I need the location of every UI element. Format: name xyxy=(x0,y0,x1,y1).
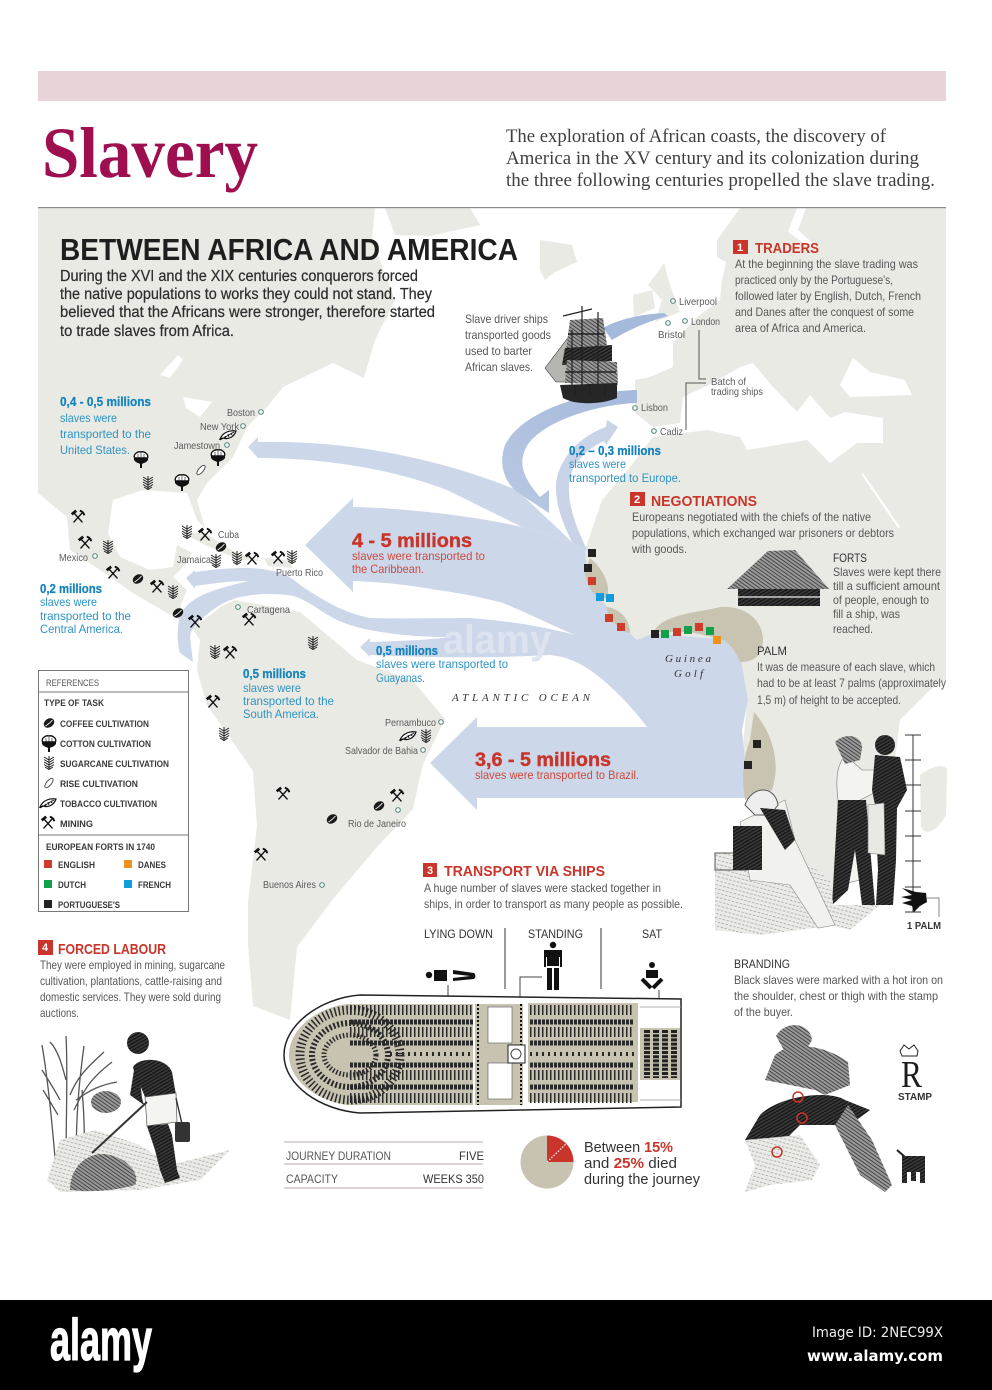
intro text xyxy=(506,127,935,191)
illustration: seated man on crate xyxy=(715,790,836,935)
America city labels: New York xyxy=(200,421,240,433)
batch of trading ships callout: Batch of xyxy=(711,376,746,388)
stat: to South America: 0,5 millions xyxy=(243,667,306,681)
table: journey facts: JOURNEY DURATION xyxy=(286,1149,391,1163)
position labels: SAT xyxy=(642,927,663,941)
stat: to Guayanas: slaves were transported to xyxy=(376,657,508,671)
panel: references legend: DUTCH xyxy=(58,880,86,891)
illustration: buyer inspecting slave xyxy=(830,735,907,930)
position labels xyxy=(424,927,663,989)
section 1: traders xyxy=(733,240,921,335)
stat: to Central America: Central America. xyxy=(40,622,123,636)
panel: references legend xyxy=(38,670,189,912)
text: branding: Black slaves were marked with a hot iron on xyxy=(734,973,943,987)
America city labels: Boston xyxy=(227,407,255,419)
caption: slave driver ships: used to barter xyxy=(465,344,532,358)
panel: references legend: RISE CULTIVATION xyxy=(60,779,138,790)
America city labels: Mexico xyxy=(59,552,88,564)
palm height scale: 1 PALM xyxy=(907,920,941,932)
arrow: Lisbon to Africa xyxy=(502,390,637,513)
Europe port labels: Cadiz xyxy=(660,426,683,438)
Europe port labels: Lisbon xyxy=(641,402,668,414)
stat: to Europe xyxy=(569,444,681,485)
section 3: transport via ships: A huge number of slaves were stacked together in xyxy=(424,881,661,895)
America city labels: Pernambuco xyxy=(385,717,436,729)
stat: to South America: transported to the xyxy=(243,694,334,708)
text: death toll: during the journey xyxy=(584,1171,700,1188)
text: forts: of people, enough to xyxy=(833,593,929,607)
panel: references legend: PORTUGUESE'S xyxy=(58,900,120,911)
label: Guinea Golf xyxy=(665,653,712,680)
text: death toll: and 25% died xyxy=(584,1155,677,1172)
panel: references legend: TOBACCO CULTIVATION xyxy=(60,799,157,810)
illustration: field worker xyxy=(42,1032,230,1192)
stat: to South America: slaves were xyxy=(243,681,301,695)
America city labels: Jamestown xyxy=(174,440,220,452)
section 1: traders: 1 xyxy=(737,242,743,254)
stat: to Europe: slaves were xyxy=(569,457,626,471)
icon: standing figure xyxy=(520,942,562,1003)
America city labels: Buenos Aires xyxy=(263,879,316,891)
stat: to Guayanas: 0,5 millions xyxy=(376,644,438,658)
palm height scale xyxy=(901,735,941,932)
pie chart: deaths during the journey xyxy=(520,1136,574,1188)
section 1: traders: area of Africa and America. xyxy=(735,321,866,335)
stat: to Europe: 0,2 – 0,3 millions xyxy=(569,444,661,458)
lead paragraph: believed that the Africans were stronger, therefore started xyxy=(60,304,435,321)
America city labels: Rio de Janeiro xyxy=(348,818,406,830)
stat: to Central America: 0,2 millions xyxy=(40,582,102,596)
panel: references legend: TYPE OF TASK xyxy=(44,698,104,709)
text: palm: had to be at least 7 palms (approximately xyxy=(757,676,946,690)
section 3: transport via ships: ships, in order to transport as many people as possible. xyxy=(424,897,683,911)
section 4: forced labour xyxy=(38,940,225,1020)
America city labels: Salvador de Bahia xyxy=(345,745,418,757)
stat: to South America: South America. xyxy=(243,707,319,721)
label: Atlantic Ocean: ATLANTIC OCEAN xyxy=(451,692,591,704)
section 1: traders: At the beginning the slave trading was xyxy=(735,257,918,271)
America city labels: Jamaica xyxy=(177,554,211,566)
stat: to South America xyxy=(243,667,334,721)
stat: to Brazil: slaves were transported to Brazil. xyxy=(475,768,639,782)
table: journey facts: FIVE xyxy=(459,1149,484,1163)
America city labels: Cartagena xyxy=(247,604,290,616)
text: forts: FORTS xyxy=(833,551,867,565)
icon: seated figure xyxy=(642,962,662,1028)
top banner band xyxy=(38,71,946,101)
panel: references legend: COTTON CULTIVATION xyxy=(60,739,151,750)
alamy watermark: alamy xyxy=(443,618,552,662)
stat: to the United States: transported to the xyxy=(60,427,151,441)
stat: to Central America: transported to the xyxy=(40,609,131,623)
text: death toll xyxy=(584,1139,700,1188)
icon: branding iron brazier xyxy=(897,1150,925,1183)
stat: to the United States: 0,4 - 0,5 millions xyxy=(60,395,151,409)
America city labels: Puerto Rico xyxy=(276,567,323,579)
arrows from Europe xyxy=(502,313,668,552)
stat: to the Caribbean: the Caribbean. xyxy=(352,562,424,576)
slave trade flow arrows xyxy=(178,437,748,810)
text: branding: BRANDING xyxy=(734,957,790,971)
panel: references legend: DANES xyxy=(138,860,166,871)
icon: stamp monogram xyxy=(898,1045,932,1103)
section 4: forced labour: They were employed in mining, sugarcane xyxy=(40,958,225,972)
America city labels: Cuba xyxy=(218,529,239,541)
footer bar: www.alamy.com xyxy=(807,1347,943,1365)
text: palm: 1,5 m) of height to be accepted. xyxy=(757,693,901,707)
batch of trading ships callout: trading ships xyxy=(711,386,763,398)
caption: slave driver ships: Slave driver ships xyxy=(465,312,548,326)
text: palm: It was de measure of each slave, which xyxy=(757,660,935,674)
table: journey facts xyxy=(284,1142,484,1188)
stat: to Guayanas xyxy=(376,644,508,685)
arrow: main stream to the Caribbean, Central and South America, Guayanas and Brazil xyxy=(178,498,748,810)
text: forts: reached. xyxy=(833,622,873,636)
text: palm xyxy=(757,644,946,707)
section 4: forced labour: 4 xyxy=(42,942,49,954)
stat: to Brazil: 3,6 - 5 millions xyxy=(475,750,611,771)
stat: to Central America xyxy=(40,582,131,636)
title: Slavery xyxy=(42,113,258,193)
text: branding: the shoulder, chest or thigh with the stamp xyxy=(734,989,938,1003)
stat: to the United States: slaves were xyxy=(60,411,117,425)
section 4: forced labour: domestic services. They were sold during xyxy=(40,990,221,1004)
panel: references legend: SUGARCANE CULTIVATION xyxy=(60,759,169,770)
stat: to the Caribbean: slaves were transported to xyxy=(352,549,485,563)
text: branding xyxy=(734,957,943,1019)
map top rule xyxy=(38,207,946,208)
caption: slave driver ships xyxy=(465,312,551,374)
icon: lying figure xyxy=(426,970,476,1003)
America city labels xyxy=(59,407,443,891)
map task icons xyxy=(72,431,431,860)
section 4: forced labour: cultivation, plantations, cattle-raising and xyxy=(40,974,222,988)
Europe port labels xyxy=(633,296,720,438)
text: death toll: Between 15% xyxy=(584,1139,673,1156)
section 2: negotiations: 2 xyxy=(634,494,640,506)
map seas and lakes xyxy=(160,208,912,528)
illustration: fort xyxy=(727,550,829,606)
European forts xyxy=(584,549,761,769)
stat: to Europe: transported to Europe. xyxy=(569,471,681,485)
intro text: the three following centuries propelled the slave trading. xyxy=(506,171,935,191)
stat: to Brazil xyxy=(475,750,639,782)
panel: references legend: MINING xyxy=(60,819,93,830)
panel: references legend: REFERENCES xyxy=(46,678,99,689)
intro text: The exploration of African coasts, the discovery of xyxy=(506,127,887,147)
section 2: negotiations: with goods. xyxy=(631,542,687,556)
lead paragraph: the native populations to works they could not stand. They xyxy=(60,286,432,303)
section 4: forced labour: auctions. xyxy=(40,1006,79,1020)
footer bar: Image ID: 2NEC99X xyxy=(812,1325,943,1341)
panel: references legend: EUROPEAN FORTS IN 1740 xyxy=(46,842,155,853)
batch of trading ships callout xyxy=(686,330,763,430)
text: forts xyxy=(833,551,941,636)
lead paragraph xyxy=(60,268,435,340)
text: branding: of the buyer. xyxy=(734,1005,793,1019)
stat: to the Caribbean: 4 - 5 millions xyxy=(352,531,472,552)
section 3: transport via ships xyxy=(423,863,683,911)
panel: references legend: COFFEE CULTIVATION xyxy=(60,719,149,730)
section 2: negotiations xyxy=(630,492,894,556)
section 1: traders: and Danes after the conquest of some xyxy=(735,305,914,319)
section 3: transport via ships: 3 xyxy=(427,865,433,877)
lead paragraph: During the XVI and the XIX centuries conquerors forced xyxy=(60,268,418,285)
table: journey facts: WEEKS 350 xyxy=(423,1172,484,1186)
label: Guinea Golf: Golf xyxy=(674,668,705,680)
section 1: traders: followed later by English, Dutch, French xyxy=(735,289,921,303)
position labels: LYING DOWN xyxy=(424,927,493,941)
table: journey facts: CAPACITY xyxy=(286,1172,338,1186)
illustration: branding scene xyxy=(745,1025,892,1192)
section 1: traders: TRADERS xyxy=(755,240,819,257)
Europe port labels: Bristol xyxy=(658,329,685,341)
stat: to the United States xyxy=(60,395,151,457)
caption: slave driver ships: African slaves. xyxy=(465,360,533,374)
footer bar: alamy xyxy=(50,1308,152,1373)
caption: slave driver ships: transported goods xyxy=(465,328,551,342)
icon: stamp monogram: STAMP xyxy=(898,1091,932,1103)
Europe port labels: London xyxy=(691,316,720,328)
intro text: America in the XV century and its colonization during xyxy=(506,149,919,169)
position labels: STANDING xyxy=(528,927,583,941)
world map land masses xyxy=(38,208,947,1020)
section 2: negotiations: Europeans negotiated with the chiefs of the native xyxy=(632,510,871,524)
diagram: slave ship deck plan xyxy=(284,995,681,1113)
text: palm: PALM xyxy=(757,644,787,658)
section 3: transport via ships: TRANSPORT VIA SHIPS xyxy=(444,863,605,880)
heading: between Africa and America: BETWEEN AFRICA AND AMERICA xyxy=(60,232,518,267)
text: forts: till a sufficient amount xyxy=(833,579,941,593)
stat: to the United States: United States. xyxy=(60,443,130,457)
section 2: negotiations: NEGOTIATIONS xyxy=(651,493,757,510)
arrow: Africa to Europe xyxy=(556,420,618,552)
section 2: negotiations: populations, which exchanged war prisoners or debtors xyxy=(632,526,894,540)
section 1: traders: practiced only by the Portuguese's, xyxy=(735,273,893,287)
coastal trade zones xyxy=(585,558,776,800)
section 4: forced labour: FORCED LABOUR xyxy=(58,941,166,958)
panel: references legend: FRENCH xyxy=(138,880,171,891)
lead paragraph: to trade slaves from Africa. xyxy=(60,323,234,340)
stat: to Guayanas: Guayanas. xyxy=(376,671,425,685)
label: Guinea Golf: Guinea xyxy=(665,653,712,665)
arrow: to Bristol xyxy=(603,313,668,340)
icon: stamp monogram: R xyxy=(901,1054,923,1096)
arrow: to United States xyxy=(248,437,572,542)
illustration: sailing ship xyxy=(545,306,618,403)
panel: references legend: ENGLISH xyxy=(58,860,95,871)
footer bar xyxy=(0,1300,992,1390)
text: forts: fill a ship, was xyxy=(833,607,900,621)
Europe port labels: Liverpool xyxy=(679,296,717,308)
stat: to Central America: slaves were xyxy=(40,595,97,609)
stat: to the Caribbean xyxy=(352,531,485,576)
text: forts: Slaves were kept there xyxy=(833,565,941,579)
